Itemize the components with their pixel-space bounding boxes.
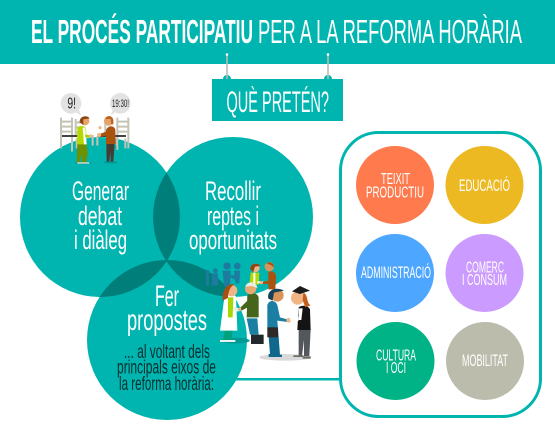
venn circles (20, 137, 313, 420)
icon: person brown shirt (260, 262, 276, 289)
title: EL PROCÉS PARTICIPATIU (31, 13, 253, 50)
icon: man in blue (259, 289, 311, 361)
circle: teixit productiu: PRODUCTIU (366, 184, 424, 202)
circle: comerç i consum: COMERC (466, 260, 504, 276)
icon: speech bubble 19:30: 19:30! (112, 98, 129, 110)
illustration: two people with chairs and speech bubbles (61, 93, 131, 164)
circle: mobilitat (446, 322, 524, 400)
icon: background silhouettes (206, 262, 241, 287)
circle: educació: EDUCACIÓ (459, 176, 510, 195)
text: al voltant dels principals eixos: principals eixos de (117, 358, 216, 378)
circle: teixit productiu (356, 146, 434, 224)
sign: què pretén (212, 53, 343, 121)
circle: comerç i consum (446, 234, 524, 312)
icon: woman in black (290, 286, 311, 359)
icon: older person in green (238, 282, 259, 335)
icon: person right (97, 116, 118, 164)
circle: administració: ADMINISTRACIÓ (361, 263, 431, 282)
circle: cultura i oci: CULTURA (376, 348, 416, 364)
text: recollir reptes i oportunitats: reptes i (207, 201, 259, 231)
circle: cultura i oci: I OCI (386, 360, 406, 377)
text: recollir reptes i oportunitats: Recollir (205, 176, 261, 206)
header banner (0, 0, 555, 64)
circle: teixit productiu: TEIXIT (381, 171, 410, 188)
text: generar debat i diàleg: i diàleg (74, 225, 127, 255)
connector line (232, 378, 341, 380)
sign: què pretén: QUÈ PRETÉN? (226, 86, 329, 119)
text: generar debat i diàleg (72, 176, 129, 255)
text: fer propostes (127, 280, 207, 337)
icon: briefcase (251, 335, 264, 344)
text: recollir reptes i oportunitats (189, 176, 277, 255)
text: generar debat i diàleg: debat (78, 201, 122, 231)
text: generar debat i diàleg: Generar (72, 176, 129, 206)
panel: eixos (340, 132, 540, 416)
icon: doctor (220, 284, 250, 344)
icon: chairs (61, 118, 128, 152)
text: al voltant dels principals eixos: la reforma horària: (119, 374, 214, 395)
text: al voltant dels principals eixos: ... al voltant dels (124, 342, 210, 363)
circle: mobilitat: MOBILITAT (462, 351, 508, 370)
circle: administració (356, 234, 434, 312)
text: fer propostes: propostes (127, 304, 207, 337)
text: al voltant dels principals eixos (117, 342, 216, 395)
icon: speech bubble 9: 9! (67, 96, 76, 113)
circle: cultura i oci (356, 322, 434, 400)
circle: educació (446, 146, 524, 224)
illustration: group of people talking (206, 262, 311, 361)
text: fer propostes: Fer (155, 280, 179, 313)
icon: person left (75, 116, 92, 164)
text: recollir reptes i oportunitats: oportunitats (189, 225, 277, 255)
circle: comerç i consum: I CONSUM (462, 272, 507, 289)
icon: person lime shirt (249, 264, 263, 285)
